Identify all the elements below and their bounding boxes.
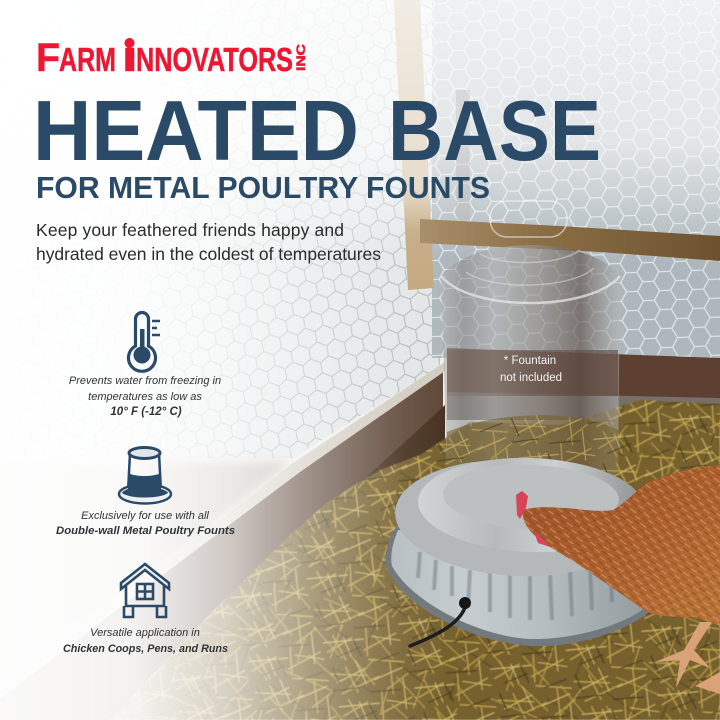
tagline: Keep your feathered friends happy and — [36, 220, 344, 240]
pan lower rim — [386, 525, 649, 646]
wooden cross rail — [420, 219, 720, 261]
pan top ring — [392, 454, 642, 582]
note: fountain not included: not included — [500, 372, 562, 384]
main heading: BASE — [388, 84, 601, 179]
brand logo — [36, 36, 308, 80]
hen body — [523, 465, 720, 626]
caption: versatile application: Chicken Coops, Pens, and Runs — [63, 643, 228, 655]
hen feather texture — [523, 465, 720, 626]
fountain handle — [490, 201, 567, 237]
brown back board — [447, 348, 720, 400]
main heading: HEATED — [33, 84, 359, 179]
floor of hay — [110, 400, 720, 720]
top white fade overlay — [0, 0, 720, 260]
cord plug — [459, 597, 471, 609]
left white fade overlay — [0, 0, 450, 720]
note: fountain not included: * Fountain — [504, 355, 556, 367]
caption: freeze protection: temperatures as low as — [88, 391, 202, 403]
hay straws through fountain — [447, 415, 618, 480]
caption: freeze protection — [69, 375, 221, 418]
brand logo: F — [36, 36, 60, 80]
tagline: hydrated even in the coldest of temperatures — [36, 244, 381, 264]
brand logo: INC — [296, 44, 308, 71]
transparent fountain — [441, 201, 620, 492]
product: heated base pan — [386, 454, 649, 646]
chicken wire wall left — [0, 0, 440, 458]
main heading — [33, 84, 601, 179]
caption: freeze protection: 10° F (-12° C) — [110, 406, 182, 418]
side wall board — [0, 371, 443, 720]
rear post stripe — [456, 90, 470, 222]
pan corrugated side — [391, 530, 642, 639]
note: fountain not included — [500, 355, 562, 384]
hen wattle — [534, 532, 550, 547]
caption: double-wall founts: Exclusively for use with all — [81, 510, 209, 522]
logo I dot — [125, 38, 134, 48]
caption: versatile application — [63, 627, 228, 655]
fountain top rim — [441, 276, 620, 303]
lower board — [300, 405, 445, 537]
hen comb — [516, 491, 528, 519]
pale wall ledge — [0, 362, 445, 699]
inner bowl step — [442, 462, 620, 532]
brand logo: ARM — [59, 41, 116, 78]
caption: double-wall founts — [56, 510, 235, 537]
hay seen through fountain — [447, 415, 618, 480]
power cord — [410, 604, 466, 646]
inner bowl — [416, 454, 646, 556]
wooden post — [394, 0, 470, 290]
icon: poultry fount — [119, 448, 171, 504]
hen leg and foot — [655, 622, 712, 688]
subheading: FOR METAL POULTRY FOUNTS — [36, 170, 490, 205]
second foot — [695, 672, 720, 694]
board seen through fountain — [447, 350, 618, 396]
fountain lid rings — [466, 250, 594, 285]
fountain body — [441, 245, 620, 492]
caption: versatile application: Versatile application in — [90, 627, 200, 639]
icon: chicken coop — [121, 564, 169, 617]
brand logo: NNOVATORS — [136, 41, 293, 78]
corrugation shading — [418, 552, 612, 620]
caption: freeze protection: Prevents water from freezing in — [69, 375, 221, 387]
chicken wire wall right — [432, 0, 720, 358]
icon: thermometer — [128, 312, 160, 371]
caption: double-wall founts: Double-wall Metal Poultry Founts — [56, 525, 235, 537]
concrete wall base — [0, 462, 290, 695]
dusty floor strip — [447, 392, 720, 420]
hen — [516, 465, 720, 694]
tagline — [36, 220, 381, 264]
